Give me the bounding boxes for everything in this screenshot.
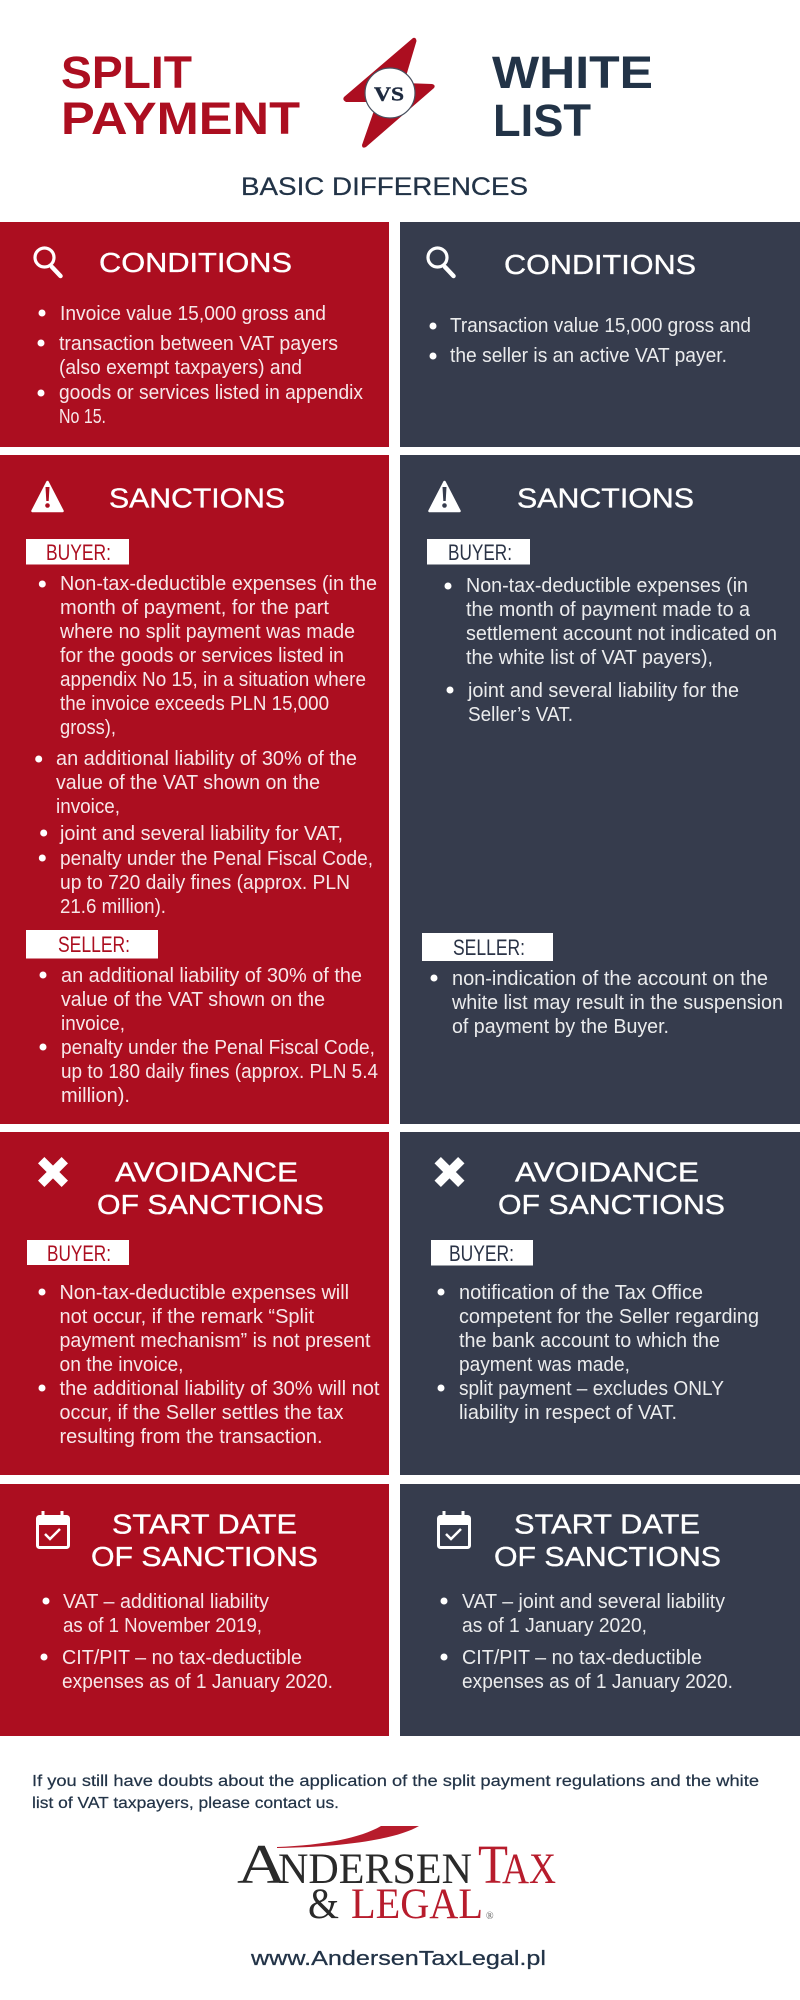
- title: split payment: SPLIT: [61, 47, 192, 98]
- logo: Andersen Tax &amp; Legal: ®: [486, 1911, 494, 1922]
- start date list: as of 1 November 2019,: [63, 1615, 262, 1637]
- conditions list: goods or services listed in appendix: [59, 382, 363, 404]
- seller list: value of the VAT shown on the: [61, 989, 325, 1011]
- icon: calendar: [38, 1511, 68, 1548]
- icon: cross: [438, 1160, 461, 1184]
- panel: conditions split payment: [0, 222, 389, 447]
- panel: avoidance white list: [400, 1132, 800, 1475]
- buyer list: penalty under the Penal Fiscal Code,: [60, 848, 373, 870]
- seller list: an additional liability of 30% of the: [61, 965, 362, 987]
- buyer list: joint and several liability for VAT,: [59, 823, 343, 845]
- buyer list: appendix No 15, in a situation where: [60, 669, 366, 691]
- logo: Andersen Tax &amp; Legal: NDERSEN: [278, 1846, 472, 1893]
- heading: start date of sanctions: START DATE: [514, 1509, 700, 1540]
- buyer list: payment mechanism” is not present: [60, 1330, 371, 1352]
- start date list: [40, 1591, 333, 1693]
- icon: warning: [32, 482, 62, 511]
- panel: start date split payment: [0, 1484, 389, 1736]
- buyer list: the additional liability of 30% will not: [60, 1378, 380, 1400]
- buyer list: liability in respect of VAT.: [459, 1402, 677, 1424]
- conditions list: transaction between VAT payers: [59, 333, 338, 355]
- title: white list: LIST: [493, 95, 591, 146]
- buyer list: Seller’s VAT.: [468, 704, 573, 726]
- heading: start date of sanctions: [91, 1509, 318, 1572]
- buyer list: month of payment, for the part: [60, 597, 329, 619]
- start date list: CIT/PIT – no tax-deductible: [62, 1647, 302, 1669]
- label: seller: [422, 933, 553, 961]
- buyer list: Non-tax-deductible expenses (in the: [60, 573, 377, 595]
- start date list: VAT – joint and several liability: [462, 1591, 725, 1613]
- label: buyer: BUYER:: [448, 540, 512, 565]
- footer note: list of VAT taxpayers, please contact us.: [32, 1795, 339, 1812]
- start date list: expenses as of 1 January 2020.: [462, 1671, 733, 1693]
- buyer list: up to 720 daily fines (approx. PLN: [60, 872, 350, 894]
- panel: sanctions split payment: [0, 455, 389, 1124]
- start date list: VAT – additional liability: [63, 1591, 269, 1613]
- icon: warning: [430, 482, 460, 511]
- panel: start date white list: [400, 1484, 800, 1736]
- footer note: [32, 1773, 759, 1812]
- heading: sanctions: SANCTIONS: [109, 483, 285, 514]
- buyer list: joint and several liability for the: [467, 680, 739, 702]
- heading: start date of sanctions: OF SANCTIONS: [91, 1541, 318, 1572]
- seller list: of payment by the Buyer.: [452, 1016, 669, 1038]
- heading: sanctions: SANCTIONS: [517, 483, 694, 514]
- buyer list: gross),: [60, 717, 116, 739]
- heading: start date of sanctions: START DATE: [112, 1509, 297, 1540]
- buyer list: for the goods or services listed in: [60, 645, 344, 667]
- title: white list: [492, 47, 653, 146]
- conditions list: Transaction value 15,000 gross and: [450, 315, 751, 337]
- panel: avoidance split payment: [0, 1132, 389, 1475]
- buyer list: occur, if the Seller settles the tax: [60, 1402, 344, 1424]
- footer note: If you still have doubts about the application of the split payment regulations and the white: [32, 1773, 759, 1790]
- buyer list: resulting from the transaction.: [60, 1426, 322, 1448]
- seller list: non-indication of the account on the: [452, 968, 768, 990]
- label: seller: SELLER:: [58, 932, 130, 957]
- seller list: invoice,: [61, 1013, 125, 1035]
- heading: avoidance of sanctions: OF SANCTIONS: [498, 1189, 725, 1220]
- seller list: million).: [61, 1085, 130, 1107]
- buyer list: settlement account not indicated on: [466, 623, 777, 645]
- start date list: [440, 1591, 733, 1693]
- buyer list: the bank account to which the: [459, 1330, 720, 1352]
- buyer list: [35, 573, 377, 918]
- logo: Andersen Tax &amp; Legal: AX: [502, 1846, 556, 1893]
- buyer list: split payment – excludes ONLY: [459, 1378, 724, 1400]
- buyer list: Non-tax-deductible expenses (in: [466, 575, 748, 597]
- seller list: [430, 968, 783, 1038]
- heading: avoidance of sanctions: OF SANCTIONS: [97, 1189, 324, 1220]
- buyer list: the invoice exceeds PLN 15,000: [60, 693, 329, 715]
- title: white list: WHITE: [492, 47, 653, 98]
- logo: Andersen Tax &amp; Legal: [237, 1826, 556, 1928]
- panel: conditions white list: [400, 222, 800, 447]
- heading: avoidance of sanctions: [97, 1157, 324, 1220]
- icon: magnifier: [35, 248, 60, 276]
- start date list: as of 1 January 2020,: [462, 1615, 647, 1637]
- logo: Andersen Tax &amp; Legal: A: [237, 1834, 288, 1896]
- icon: versus lightning bolt: VS: [374, 84, 404, 106]
- buyer list: the white list of VAT payers),: [466, 647, 713, 669]
- buyer list: an additional liability of 30% of the: [56, 748, 357, 770]
- label: buyer: BUYER:: [449, 1241, 514, 1266]
- buyer list: the month of payment made to a: [466, 599, 751, 621]
- seller list: white list may result in the suspension: [451, 992, 783, 1014]
- heading: avoidance of sanctions: AVOIDANCE: [515, 1157, 699, 1188]
- buyer list: [38, 1282, 380, 1448]
- title: split payment: PAYMENT: [61, 93, 300, 144]
- buyer list: not occur, if the remark “Split: [60, 1306, 314, 1328]
- buyer list: invoice,: [56, 796, 120, 818]
- label: buyer: BUYER:: [47, 1241, 111, 1266]
- icon: magnifier: [428, 248, 454, 276]
- heading: start date of sanctions: OF SANCTIONS: [494, 1541, 721, 1572]
- label: seller: [26, 930, 158, 958]
- buyer list: where no split payment was made: [59, 621, 355, 643]
- conditions list: the seller is an active VAT payer.: [450, 345, 727, 367]
- subtitle: BASIC DIFFERENCES: [241, 173, 528, 201]
- heading: start date of sanctions: [494, 1509, 721, 1572]
- start date list: expenses as of 1 January 2020.: [62, 1671, 333, 1693]
- buyer list: on the invoice,: [60, 1354, 184, 1376]
- buyer list: Non-tax-deductible expenses will: [60, 1282, 349, 1304]
- icon: cross: [41, 1160, 65, 1184]
- conditions list: [430, 315, 751, 367]
- seller list: up to 180 daily fines (approx. PLN 5.4: [61, 1061, 378, 1083]
- label: seller: SELLER:: [453, 935, 525, 960]
- icon: calendar: [438, 1511, 470, 1548]
- conditions list: No 15.: [59, 406, 106, 428]
- panel: sanctions white list: [400, 455, 800, 1124]
- buyer list: [444, 575, 777, 726]
- conditions list: Invoice value 15,000 gross and: [60, 303, 326, 325]
- heading: conditions: CONDITIONS: [99, 247, 292, 278]
- heading: avoidance of sanctions: AVOIDANCE: [115, 1157, 298, 1188]
- logo: Andersen Tax &amp; Legal: &: [308, 1881, 339, 1928]
- buyer list: 21.6 million).: [60, 896, 166, 918]
- conditions list: (also exempt taxpayers) and: [59, 357, 302, 379]
- buyer list: [438, 1282, 759, 1424]
- heading: conditions: CONDITIONS: [504, 249, 696, 280]
- start date list: CIT/PIT – no tax-deductible: [462, 1647, 702, 1669]
- title: split payment: [61, 47, 300, 144]
- buyer list: payment was made,: [459, 1354, 630, 1376]
- heading: avoidance of sanctions: [498, 1157, 725, 1220]
- website: www.AndersenTaxLegal.pl: [250, 1948, 546, 1970]
- buyer list: notification of the Tax Office: [459, 1282, 703, 1304]
- buyer list: competent for the Seller regarding: [459, 1306, 759, 1328]
- icon: versus lightning bolt: [343, 38, 435, 148]
- conditions list: [38, 303, 363, 428]
- logo: Andersen Tax &amp; Legal: LEGAL: [351, 1881, 483, 1928]
- seller list: penalty under the Penal Fiscal Code,: [61, 1037, 375, 1059]
- logo: Andersen Tax &amp; Legal: T: [478, 1834, 508, 1895]
- seller list: [40, 965, 378, 1107]
- buyer list: value of the VAT shown on the: [56, 772, 320, 794]
- label: buyer: BUYER:: [46, 540, 111, 565]
